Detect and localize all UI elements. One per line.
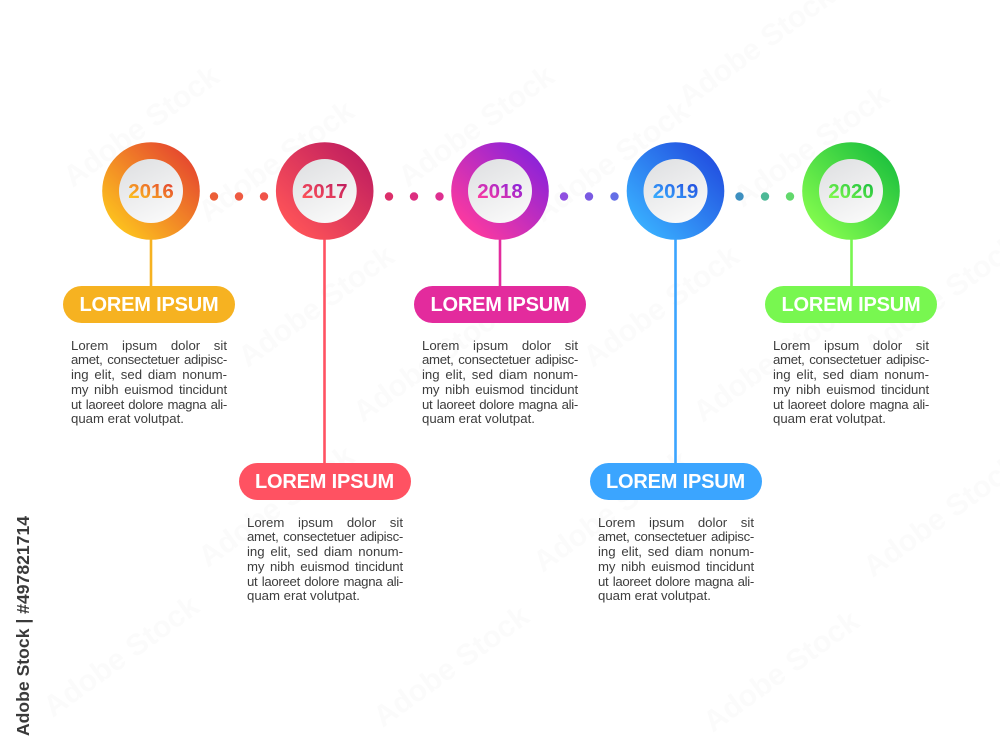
heading pill 2018: LOREM IPSUM xyxy=(431,294,569,316)
text block 2018 xyxy=(422,338,578,426)
text: Adobe Stock xyxy=(528,94,695,229)
text block 2017: ut laoreet dolore magna ali- xyxy=(247,574,403,589)
text: Adobe Stock xyxy=(393,59,560,194)
text block 2020: quam erat volutpat. xyxy=(773,411,886,426)
text block 2019: Lorem ipsum dolor sit xyxy=(598,514,754,530)
text block 2020: ut laoreet dolore magna ali- xyxy=(773,397,929,412)
year badge 2020: 2020 xyxy=(828,180,874,203)
text: Adobe Stock xyxy=(698,604,865,739)
text block 2016: ing elit, sed diam nonum- xyxy=(71,367,227,382)
text block 2019 xyxy=(598,514,754,603)
year badge 2016 xyxy=(102,142,200,240)
text: Adobe Stock xyxy=(58,59,225,194)
text block 2017: my nibh euismod tincidunt xyxy=(247,559,403,574)
heading pill 2016 xyxy=(63,286,235,323)
year badge 2016: 2016 xyxy=(128,180,174,203)
text block 2018: amet, consectetuer adipisc- xyxy=(422,352,578,367)
text block 2020 xyxy=(773,338,930,426)
leader line 2017 xyxy=(323,235,326,467)
text block 2018: my nibh euismod tincidunt xyxy=(422,382,578,397)
connector dots 2017 to 2018 xyxy=(385,192,444,201)
text block 2017: Lorem ipsum dolor sit xyxy=(247,514,403,530)
text block 2018: quam erat volutpat. xyxy=(422,411,535,426)
year badge 2018: 2018 xyxy=(477,180,523,203)
heading pill 2017 xyxy=(238,463,410,500)
leader line 2018 xyxy=(499,235,501,290)
text block 2018: ut laoreet dolore magna ali- xyxy=(422,397,578,412)
text: Adobe Stock xyxy=(688,294,855,429)
year badge 2017: 2017 xyxy=(302,180,348,203)
text block 2016 xyxy=(71,338,228,426)
year badge 2019 xyxy=(627,142,724,240)
heading pill 2020 xyxy=(765,286,937,323)
heading pill 2019 xyxy=(590,463,762,500)
text block 2019: quam erat volutpat. xyxy=(598,588,711,603)
text block 2018: Lorem ipsum dolor sit xyxy=(422,338,578,352)
leader line 2019 xyxy=(674,235,677,467)
text block 2020: Lorem ipsum dolor sit xyxy=(773,338,929,352)
connector dots 2019 to 2020 xyxy=(735,192,794,201)
text block 2016: Lorem ipsum dolor sit xyxy=(71,338,227,352)
text block 2017 xyxy=(247,514,404,603)
text block 2018: ing elit, sed diam nonum- xyxy=(422,367,578,382)
text block 2017: amet, consectetuer adipisc- xyxy=(247,529,403,544)
text: Adobe Stock xyxy=(38,589,205,724)
text: Adobe Stock xyxy=(193,94,360,229)
year badge 2020 xyxy=(802,142,900,240)
heading pill 2017: LOREM IPSUM xyxy=(255,471,394,493)
connector dots 2018 to 2019 xyxy=(560,192,619,201)
text: Adobe Stock xyxy=(578,239,745,374)
text block 2019: amet, consectetuer adipisc- xyxy=(598,529,754,544)
text block 2020: my nibh euismod tincidunt xyxy=(773,382,929,397)
text block 2016: ut laoreet dolore magna ali- xyxy=(71,397,227,412)
leader line 2020 xyxy=(850,235,853,290)
year badge 2019: 2019 xyxy=(653,180,698,203)
text block 2017: quam erat volutpat. xyxy=(247,588,360,603)
text block 2020: ing elit, sed diam nonum- xyxy=(773,367,929,382)
stock watermark id: Adobe Stock | #497821714 xyxy=(13,516,33,736)
year badge 2018 xyxy=(451,142,549,240)
text: Adobe Stock xyxy=(528,444,695,579)
text block 2019: my nibh euismod tincidunt xyxy=(598,559,754,574)
text: Adobe Stock xyxy=(193,439,360,574)
text: Adobe Stock xyxy=(728,79,895,214)
text block 2016: amet, consectetuer adipisc- xyxy=(71,352,227,367)
text block 2020: amet, consectetuer adipisc- xyxy=(773,352,929,367)
connector dots 2016 to 2017 xyxy=(210,192,268,201)
text: Adobe Stock xyxy=(348,294,515,429)
text block 2016: quam erat volutpat. xyxy=(71,411,184,426)
text: Adobe Stock xyxy=(233,239,400,374)
leader line 2016 xyxy=(150,235,152,290)
heading pill 2016: LOREM IPSUM xyxy=(80,294,218,316)
heading pill 2019: LOREM IPSUM xyxy=(606,471,745,493)
text block 2017: ing elit, sed diam nonum- xyxy=(247,544,403,559)
year badge 2017 xyxy=(276,142,374,240)
heading pill 2018 xyxy=(414,286,586,323)
text: Adobe Stock xyxy=(368,599,535,734)
text block 2019: ing elit, sed diam nonum- xyxy=(598,544,754,559)
text block 2016: my nibh euismod tincidunt xyxy=(71,382,227,397)
heading pill 2020: LOREM IPSUM xyxy=(782,294,920,316)
text block 2019: ut laoreet dolore magna ali- xyxy=(598,574,754,589)
